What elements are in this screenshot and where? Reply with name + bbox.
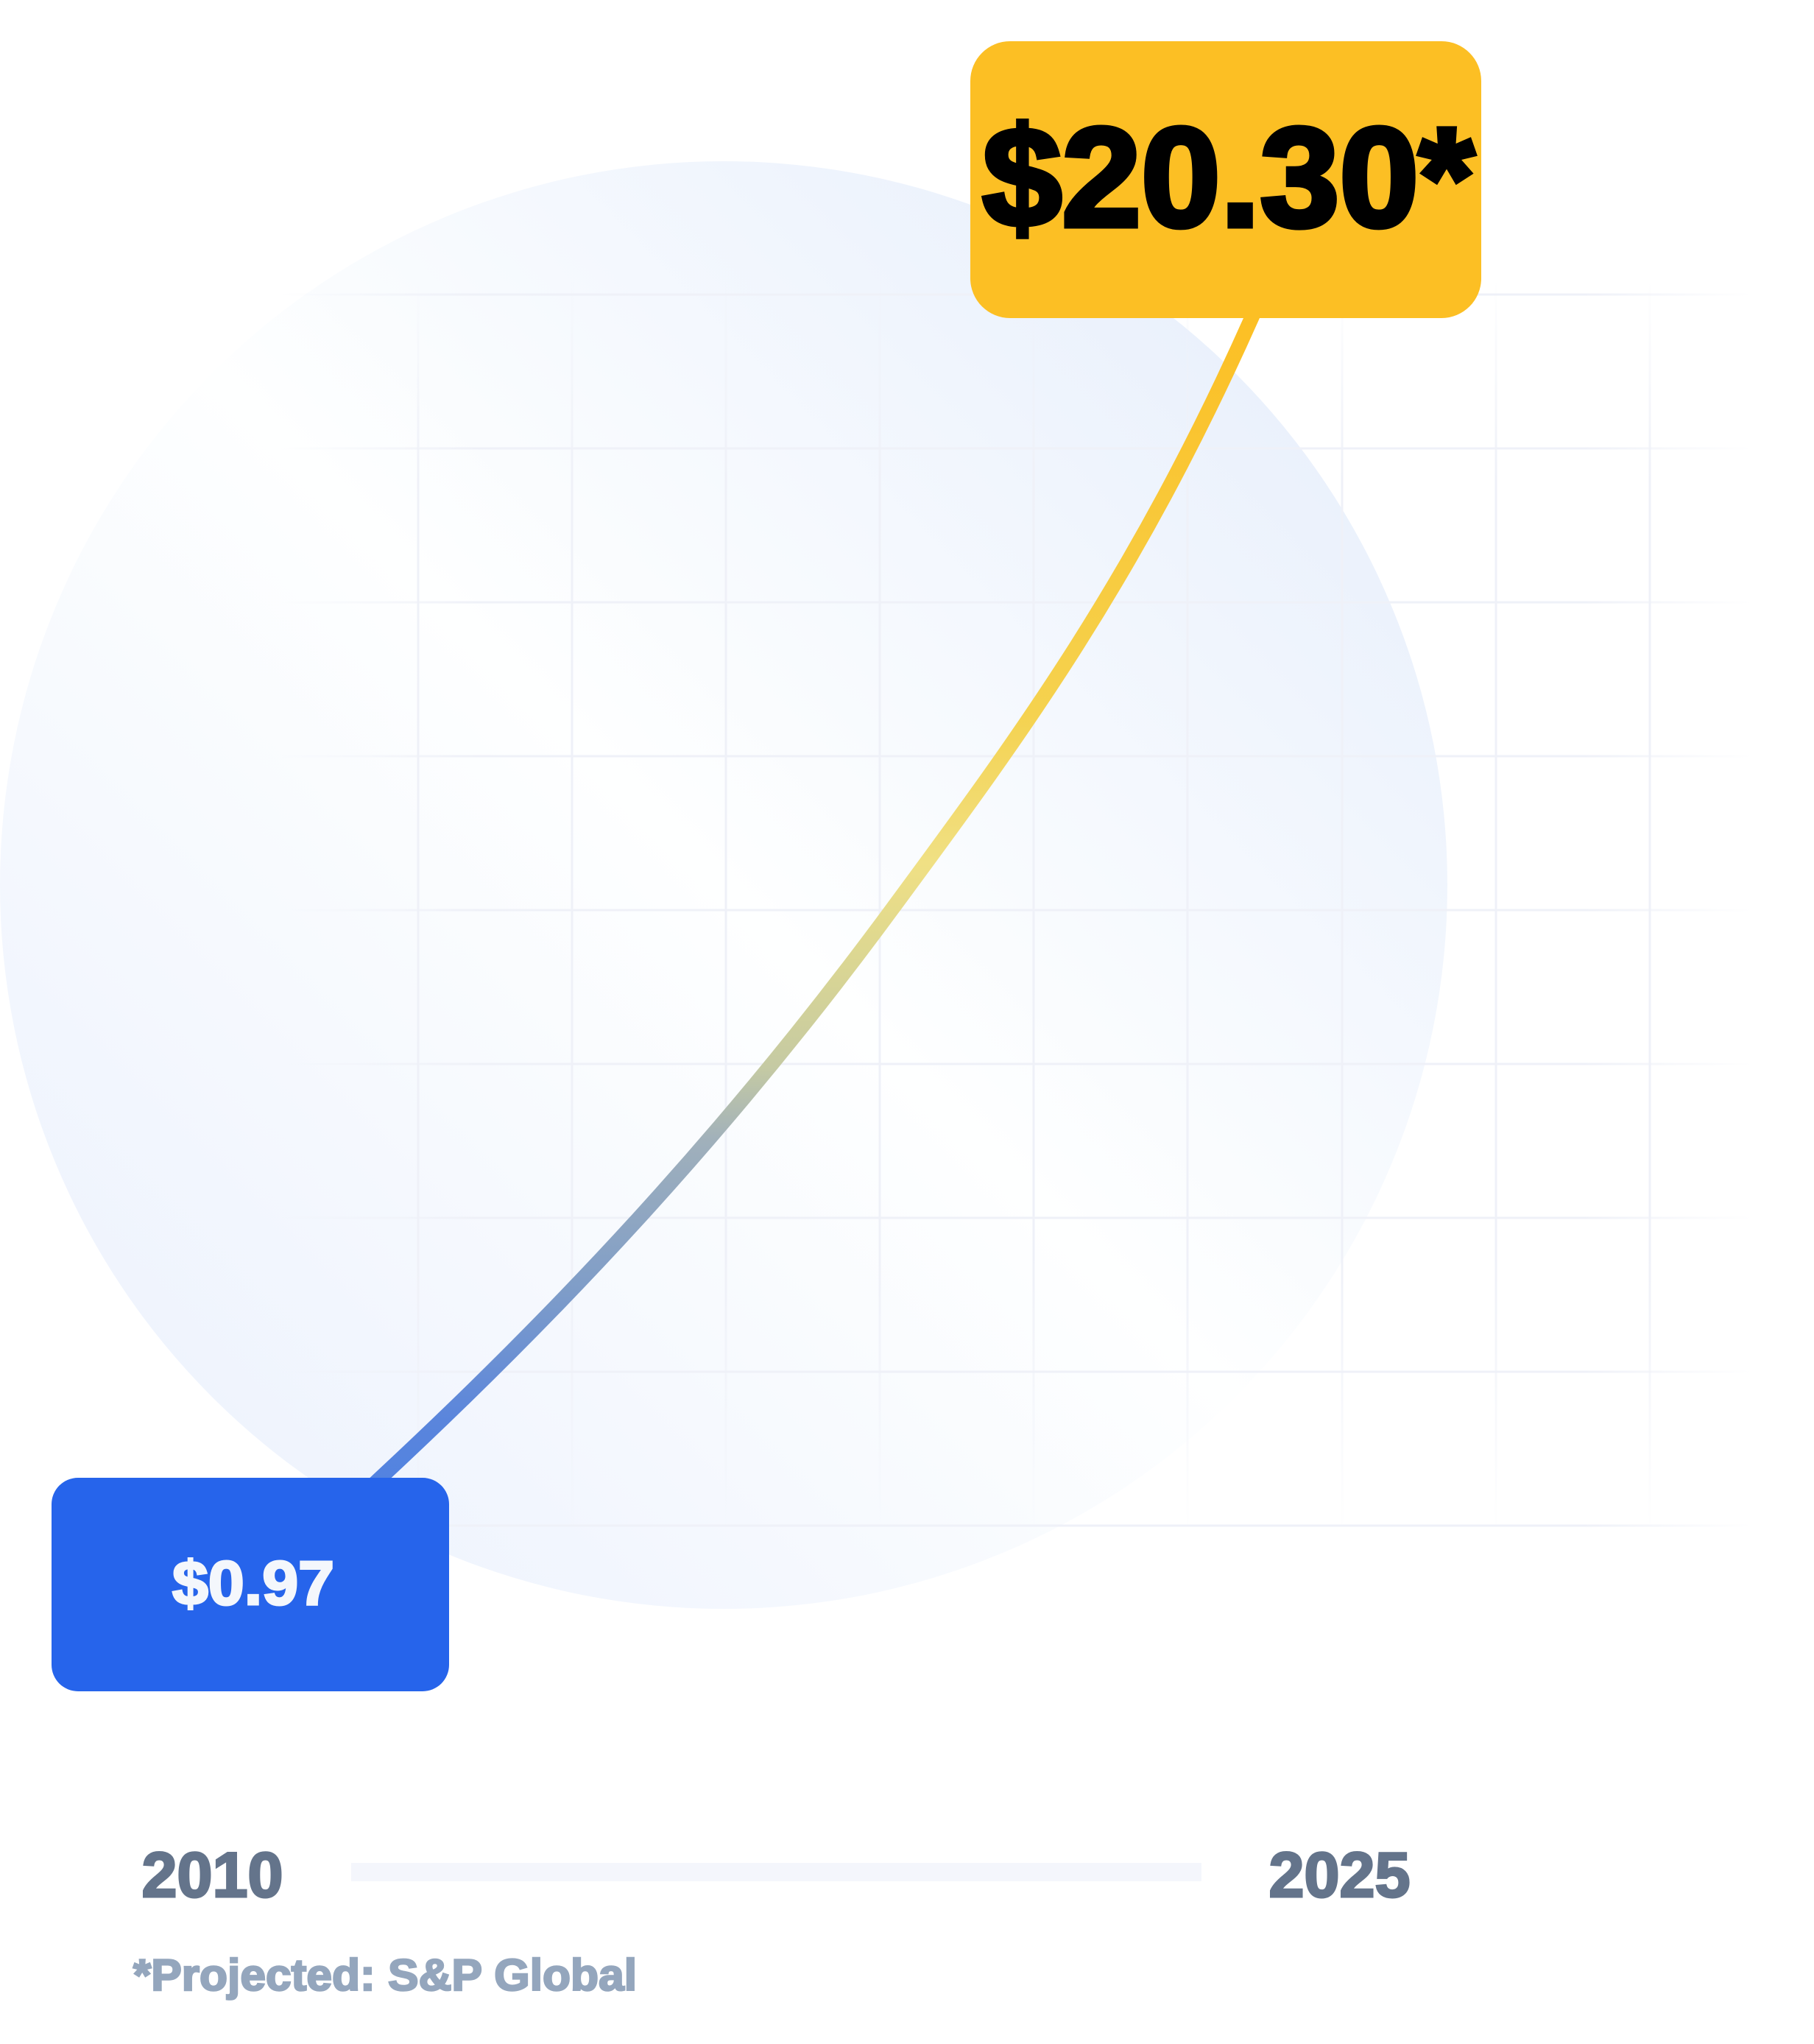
value callout: 2025 projected: $20.30* — [982, 98, 1475, 256]
value callout: 2010 — [52, 1478, 449, 1691]
background circle — [0, 161, 1447, 1609]
source footnote: *Projected: S&P Global — [133, 1950, 637, 2000]
value callout: 2010: $0.97 — [172, 1548, 334, 1618]
chart grid — [280, 280, 1752, 1532]
axis timeline bar — [351, 1863, 1201, 1881]
growth curve — [361, 293, 1263, 1497]
axis end label: 2025 — [1269, 1840, 1411, 1911]
axis start label: 2010 — [141, 1840, 283, 1911]
value callout: 2025 projected — [970, 41, 1481, 318]
